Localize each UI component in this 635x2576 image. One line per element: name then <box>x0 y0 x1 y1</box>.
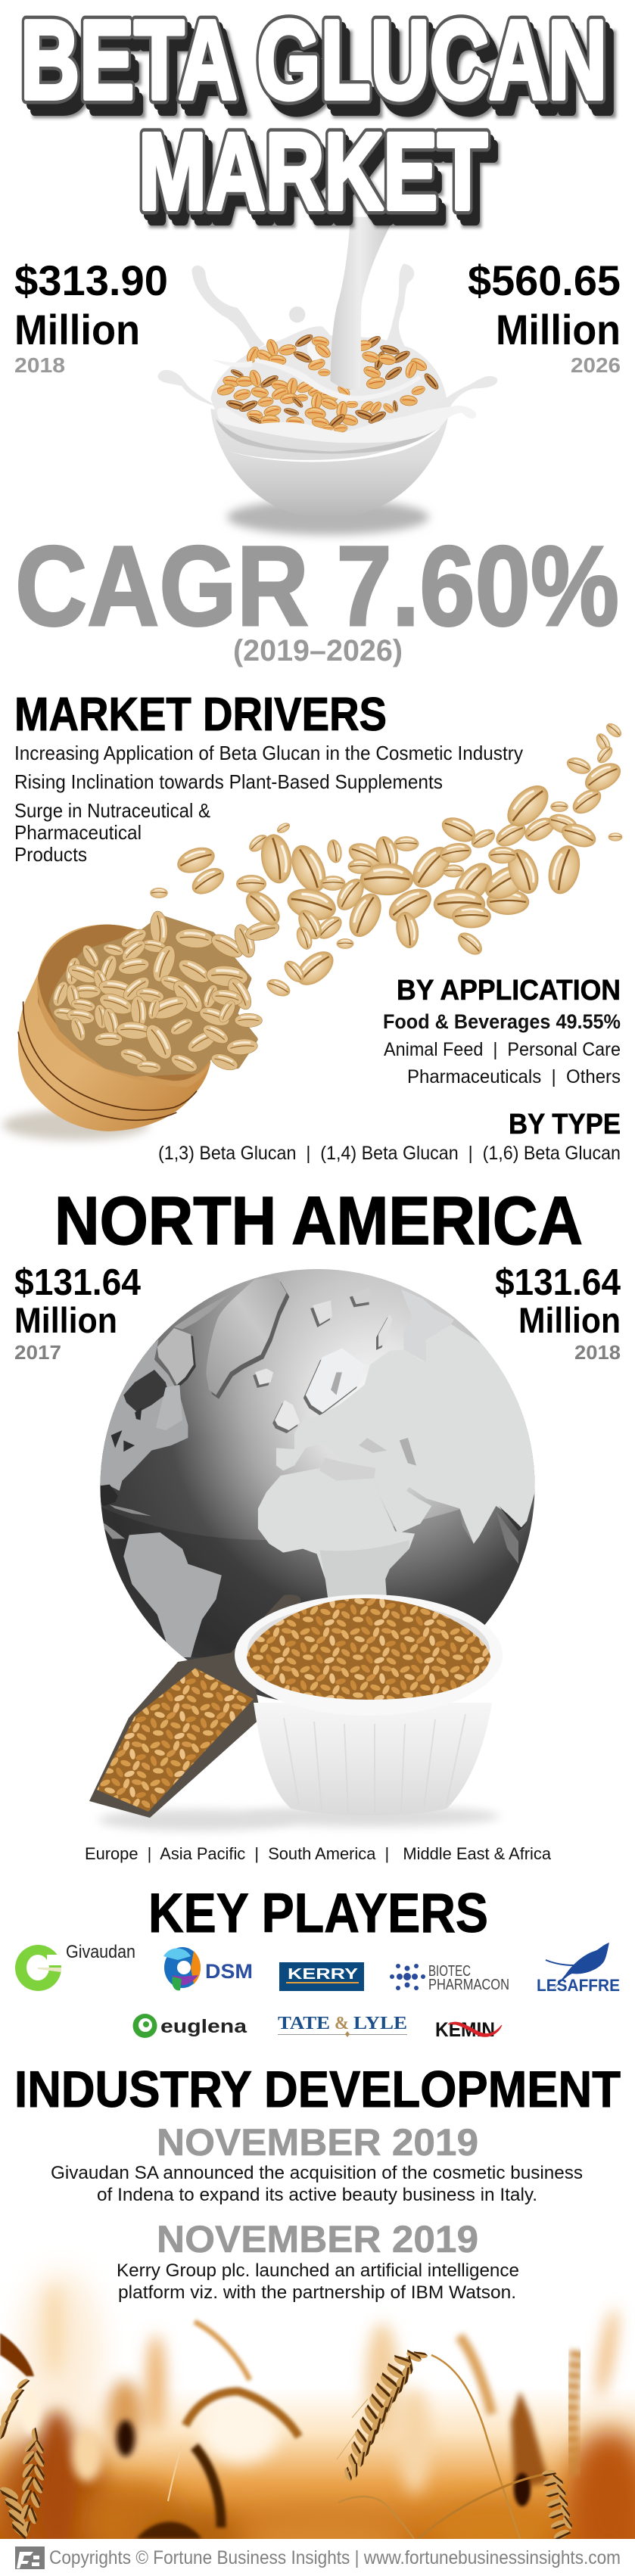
logo: Biotec Pharmacon <box>390 1963 509 1993</box>
event: November 2019 Givaudan: NOVEMBER 2019 <box>157 2121 478 2164</box>
illustration: wooden bowl of oats <box>2 910 281 1140</box>
logo: Givaudan: Givaudan <box>66 1942 135 1962</box>
stat: 2018 market size: $313.90 <box>14 257 168 304</box>
logo: euglena <box>133 2014 247 2038</box>
stat: north america 2017: 2017 <box>14 1341 61 1364</box>
event: November 2019 Kerry: Kerry Group plc. launched an artificial intelligence <box>117 2260 519 2281</box>
logo: Kerry: KERRY <box>288 1966 359 1983</box>
event: November 2019 Kerry <box>117 2218 519 2303</box>
illustration: wheat field <box>0 2263 635 2539</box>
stat: 2018 market size: Million <box>14 306 140 353</box>
application segments: Pharmaceuticals | Others <box>407 1066 621 1087</box>
event: November 2019 Kerry: platform viz. with the partnership of IBM Watson. <box>118 2282 516 2303</box>
logo: Lesaffre: LESAFFRE <box>537 1976 620 1995</box>
logo: Tate & Lyle: TATE <box>278 2014 330 2033</box>
title <box>20 0 618 246</box>
logo: DSM <box>163 1947 253 1990</box>
heading: by application: BY APPLICATION <box>397 975 621 1006</box>
illustration: flying oat flakes <box>150 720 625 1000</box>
stat: 2026 market size: 2026 <box>571 353 621 377</box>
logo: Lesaffre <box>537 1943 620 1995</box>
application segments <box>383 1010 621 1087</box>
logo: Biotec Pharmacon: PHARMACON <box>428 1977 509 1993</box>
logo: Givaudan <box>15 1942 135 1991</box>
application segments: Food & Beverages 49.55% <box>383 1010 621 1033</box>
logo: euglena: euglena <box>160 2016 247 2037</box>
title: MARKET <box>142 117 491 238</box>
title: MARKET <box>146 122 495 244</box>
application segments: Animal Feed | Personal Care <box>384 1039 621 1060</box>
market drivers list: Rising Inclination towards Plant-Based Supplements <box>14 770 443 793</box>
stat: 2018 market size: 2018 <box>14 353 65 377</box>
stat: north america 2018: Million <box>518 1300 621 1340</box>
regions list: Europe | Asia Pacific | South America | Middle East & Africa <box>85 1844 552 1863</box>
market drivers list: Products <box>14 843 87 866</box>
event: November 2019 Kerry: NOVEMBER 2019 <box>157 2218 478 2260</box>
event: November 2019 Givaudan: Givaudan SA announced the acquisition of the cosmetic business <box>51 2163 583 2183</box>
stat: 2018 market size <box>14 257 168 377</box>
illustration: cereal bowl with milk <box>157 217 497 535</box>
title: MARKET <box>139 110 487 232</box>
market drivers list: Surge in Nutraceutical & <box>14 799 210 822</box>
heading: market drivers: MARKET DRIVERS <box>14 689 387 741</box>
illustration: scoop of flax seeds <box>89 1594 301 1831</box>
stat: north america 2017: Million <box>14 1300 117 1340</box>
market drivers list: Pharmaceutical <box>14 821 142 844</box>
illustration: white bowl of seeds <box>235 1594 503 1827</box>
logo: Tate & Lyle <box>278 2014 407 2037</box>
heading: by type: BY TYPE <box>509 1109 621 1140</box>
stat: north america 2017 <box>14 1262 141 1364</box>
stat: 2026 market size <box>468 257 621 377</box>
logo: Kemin: KEMIN <box>435 2018 495 2041</box>
event: November 2019 Givaudan <box>51 2121 583 2205</box>
logo: Biotec Pharmacon: BIOTEC <box>428 1963 471 1980</box>
title: MARKET <box>148 124 496 246</box>
logo: Tate & Lyle: & <box>335 2014 349 2033</box>
stat: north america 2018: $131.64 <box>495 1262 621 1303</box>
logo: Tate & Lyle: LYLE <box>353 2014 407 2033</box>
market drivers list: Increasing Application of Beta Glucan in the Cosmetic Industry <box>14 742 523 764</box>
market drivers list <box>14 742 523 866</box>
CAGR period: (2019–2026) <box>233 634 403 667</box>
logo: Kerry <box>279 1962 364 1991</box>
heading: north america: NORTH AMERICA <box>54 1184 583 1259</box>
stat: north america 2017: $131.64 <box>14 1262 141 1303</box>
title: MARKET <box>139 110 487 232</box>
footer logo <box>15 2546 45 2569</box>
stat: 2026 market size: Million <box>496 306 621 353</box>
event: November 2019 Givaudan: of Indena to expand its active beauty business in Italy. <box>97 2185 537 2205</box>
stat: 2026 market size: $560.65 <box>468 257 621 304</box>
stat: north america 2018 <box>495 1262 621 1364</box>
globe <box>98 1264 537 1703</box>
logo: DSM: DSM <box>205 1960 253 1983</box>
stat: north america 2018: 2018 <box>574 1341 621 1364</box>
heading: key players: KEY PLAYERS <box>148 1883 488 1944</box>
